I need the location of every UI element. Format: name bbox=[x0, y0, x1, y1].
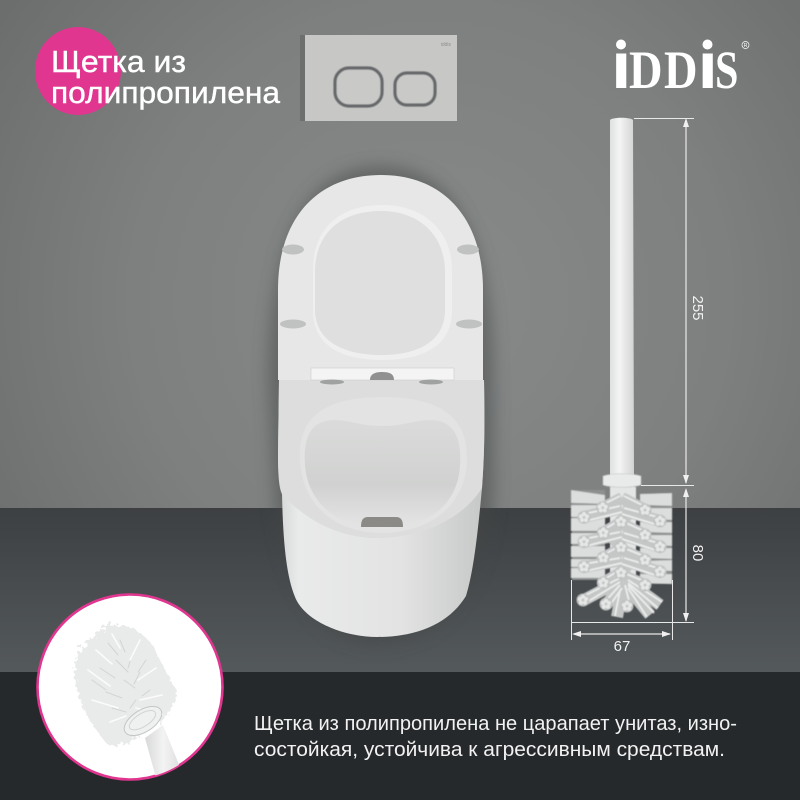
brand logo: R bbox=[744, 43, 748, 49]
brush head stem bbox=[610, 487, 636, 592]
toilet bbox=[278, 175, 484, 637]
collar bbox=[119, 701, 167, 741]
floor bbox=[0, 508, 800, 673]
close-up circle bbox=[38, 594, 222, 780]
brand logo: I bbox=[698, 43, 717, 99]
description text: Щетка из полипропилена не царапает унитаз, изно- bbox=[254, 712, 737, 735]
dimension 255: 255 bbox=[689, 295, 706, 321]
heading: Щетка из bbox=[51, 44, 186, 79]
dimension arrowheads bbox=[572, 118, 689, 637]
brand logo: D bbox=[664, 40, 698, 100]
seat recess bbox=[313, 205, 452, 360]
flush plate brand: iddis bbox=[441, 42, 451, 48]
seat bumpers bbox=[280, 244, 482, 328]
brush diagram bbox=[571, 118, 672, 617]
bowl basin bbox=[305, 420, 460, 528]
brand logo: I bbox=[612, 43, 631, 99]
flush plate bbox=[300, 35, 457, 121]
toilet bowl body bbox=[278, 380, 484, 637]
brush collar bbox=[603, 474, 641, 487]
brand logo: S bbox=[715, 41, 738, 100]
hinge strip bbox=[311, 368, 454, 380]
hinge feet bbox=[320, 380, 443, 384]
dimension lines bbox=[572, 118, 694, 640]
hinge clip bbox=[370, 372, 394, 380]
handle bbox=[145, 726, 179, 776]
heading second line: полипропилена bbox=[51, 75, 281, 110]
dark bottom band bbox=[0, 672, 800, 800]
dimension 67: 67 bbox=[614, 638, 630, 655]
bowl rim surface bbox=[278, 380, 484, 538]
bowl opening bbox=[300, 397, 467, 533]
bowl drain bbox=[361, 517, 403, 527]
brush bristle tufts bbox=[580, 496, 662, 617]
large flush button bbox=[335, 68, 382, 106]
toilet seat bbox=[278, 175, 483, 380]
brush pole bbox=[610, 118, 634, 480]
pink circle badge bbox=[35, 27, 121, 115]
brand logo bbox=[612, 40, 749, 100]
bristle tips bbox=[576, 501, 666, 612]
brush head back bristles bbox=[571, 490, 672, 584]
dimension 80: 80 bbox=[689, 545, 706, 561]
bristle head bbox=[75, 624, 178, 745]
brush head shadow backing bbox=[572, 490, 672, 584]
description second line: состойкая, устойчива к агрессивным средствам. bbox=[254, 738, 725, 761]
toilet shadow bbox=[268, 166, 494, 645]
brush close-up bbox=[38, 594, 222, 785]
brush head bbox=[571, 474, 672, 617]
small flush button bbox=[395, 73, 435, 105]
brand logo: D bbox=[629, 40, 663, 100]
wall background bbox=[0, 0, 800, 509]
seat inner panel bbox=[315, 211, 445, 355]
